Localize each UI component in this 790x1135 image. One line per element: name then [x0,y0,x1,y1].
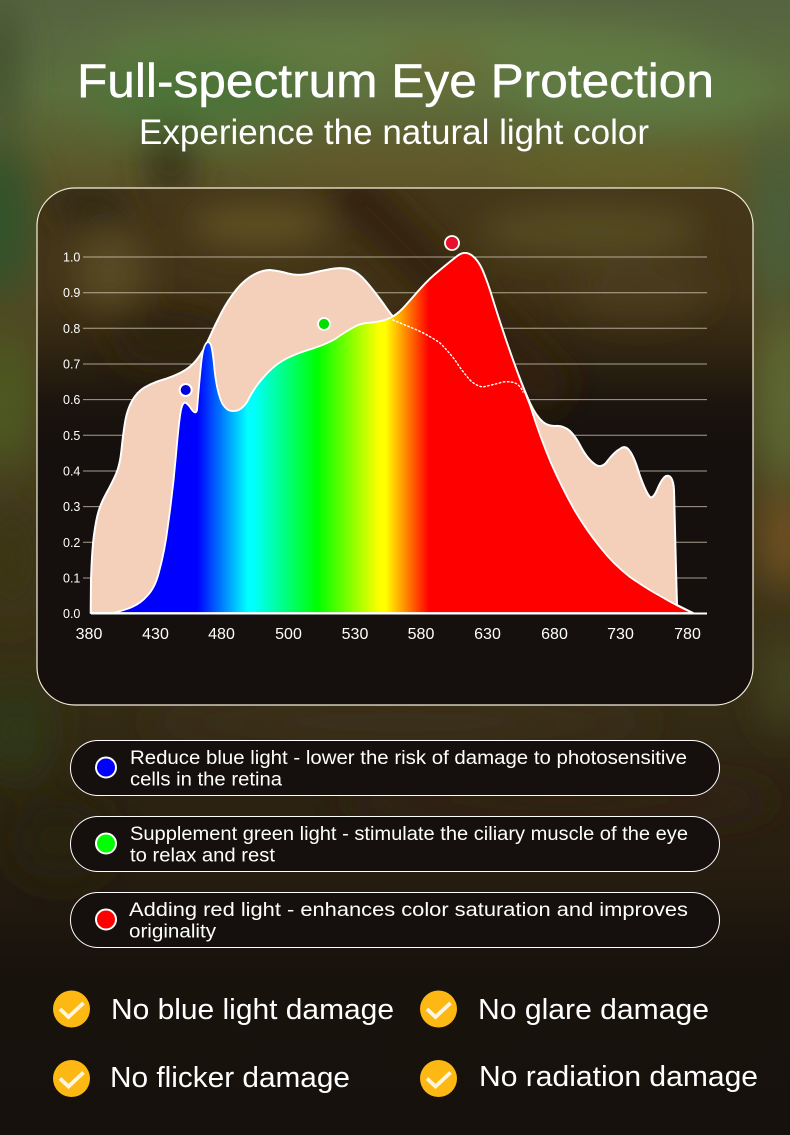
dotted reference curve [393,320,523,392]
rainbow LED spectrum area [113,253,693,613]
y axis labels: 0.7 [63,358,80,372]
x axis labels: 580 [408,626,434,643]
x axis labels: 530 [342,626,368,643]
callout: blue light: Reduce blue light - lower the risk of damage to photosensitive [130,748,687,769]
y axis labels: 0.2 [63,536,80,550]
x axis labels: 680 [541,626,568,643]
x axis labels: 780 [674,626,701,643]
chart grid lines [83,257,707,578]
x axis labels: 500 [275,626,302,643]
y axis labels: 0.4 [63,464,80,478]
x axis labels: 380 [76,626,102,643]
marker: blue [180,384,192,396]
y axis labels: 0.1 [63,572,80,586]
callout: green light: to relax and rest [130,846,276,866]
x axis labels: 430 [142,626,169,643]
marker: red [445,236,459,250]
benefit: no flicker damage: No flicker damage [110,1062,350,1094]
callout: green light [70,816,720,872]
x axis labels: 480 [208,626,235,643]
y axis labels: 1.0 [63,250,80,264]
x axis labels: 630 [474,626,501,643]
benefit: no radiation damage [420,1060,758,1097]
benefit: no glare damage [420,990,709,1028]
subtitle: Experience the natural light color [139,113,649,152]
marker: green [318,318,330,330]
x axis labels: 730 [607,626,634,643]
callout: red light [70,892,720,948]
benefit: no blue light damage [53,990,394,1028]
y axis labels: 0.6 [63,393,80,407]
y axis labels: 0.3 [63,500,80,514]
callout: blue light: cells in the retina [130,770,282,790]
callout: green light: Supplement green light - stimulate the ciliary muscle of the eye [130,824,688,845]
panel: spectrum chart [37,180,753,705]
y axis labels: 0.9 [63,286,80,300]
peach full-spectrum sunlight area [91,253,693,613]
benefit: no flicker damage [53,1060,350,1097]
callout: red light: Adding red light - enhances color saturation and improves [129,900,688,921]
benefit: no blue light damage: No blue light damage [111,994,394,1026]
baseline [91,612,707,614]
x axis labels [76,626,701,643]
title: Full-spectrum Eye Protection [77,54,714,107]
callout: blue light [70,740,720,796]
benefit: no glare damage: No glare damage [478,994,709,1026]
y axis labels: 0.8 [63,322,80,336]
y axis labels [63,250,80,621]
y axis labels: 0.5 [63,429,80,443]
benefit: no radiation damage: No radiation damage [479,1061,758,1093]
callout: red light: originality [129,922,217,942]
y axis labels: 0.0 [63,607,80,621]
